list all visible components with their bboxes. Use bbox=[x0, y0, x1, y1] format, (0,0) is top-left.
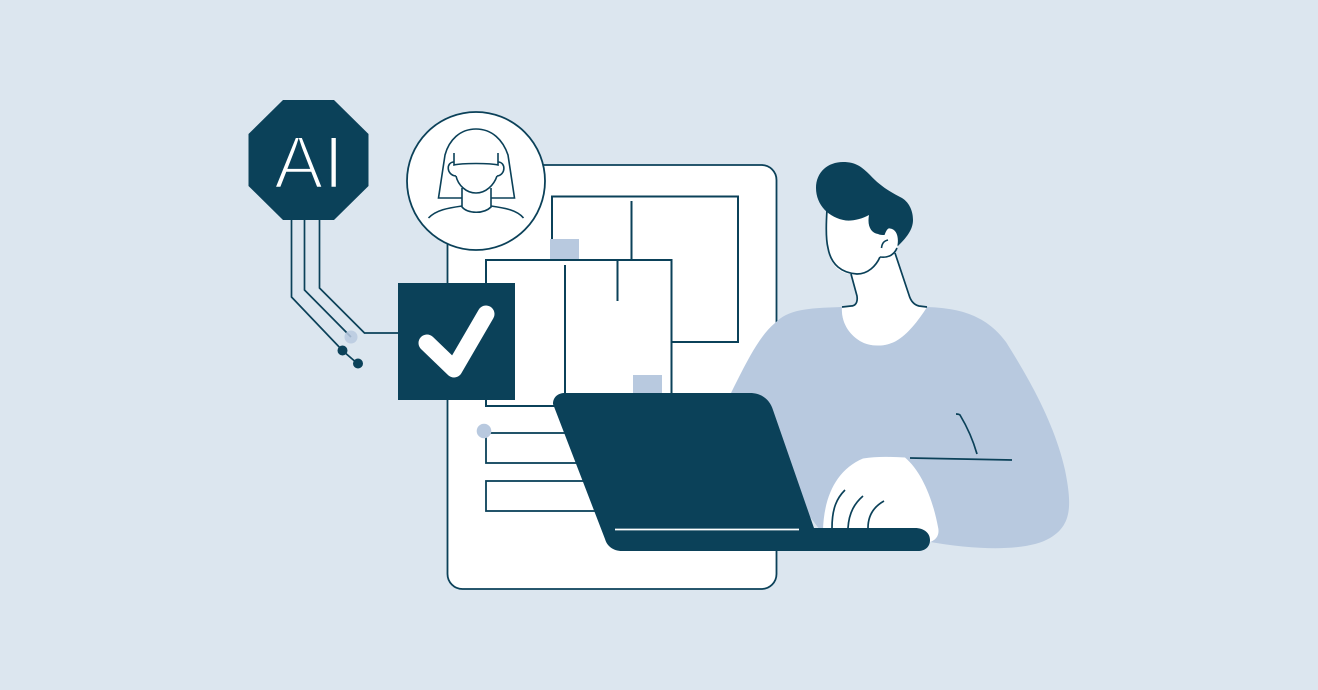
laptop bbox=[553, 393, 930, 551]
sleeve crease bbox=[956, 414, 977, 454]
blue marker: upper bbox=[550, 239, 579, 260]
fingers bbox=[832, 490, 884, 528]
neck and face fill bbox=[827, 205, 927, 346]
face bbox=[456, 176, 497, 193]
forearm line bbox=[910, 458, 1012, 460]
dark node 1 bbox=[338, 346, 348, 356]
text line box 2 bbox=[486, 481, 616, 511]
face outline bbox=[826, 210, 880, 274]
sweater bbox=[725, 307, 1069, 548]
upper layout block bbox=[552, 196, 738, 342]
text line box 1 bbox=[486, 433, 616, 463]
AI label: AI bbox=[274, 121, 344, 204]
fringe bbox=[454, 153, 498, 165]
icon: AI octagon bbox=[248, 100, 368, 220]
blue marker: lower bbox=[633, 375, 662, 397]
blue node bbox=[344, 330, 358, 344]
laptop highlight bbox=[615, 528, 799, 530]
lower layout block bbox=[486, 260, 672, 406]
shoulders bbox=[428, 206, 524, 218]
ears bbox=[448, 162, 504, 176]
hair outline bbox=[438, 129, 514, 198]
neck bbox=[462, 188, 491, 212]
panel: document page bbox=[448, 165, 776, 589]
dark node 2 bbox=[353, 358, 363, 368]
hand bbox=[823, 457, 939, 542]
icon: woman portrait in circle bbox=[407, 112, 545, 250]
panel: person bbox=[725, 162, 1069, 548]
blue dot bbox=[477, 424, 491, 438]
ear bbox=[880, 228, 898, 257]
laptop body bbox=[553, 393, 930, 551]
circuit lines bbox=[292, 220, 400, 368]
hair bbox=[816, 162, 913, 246]
icon: check box bbox=[398, 283, 515, 400]
neck lines bbox=[842, 253, 927, 307]
